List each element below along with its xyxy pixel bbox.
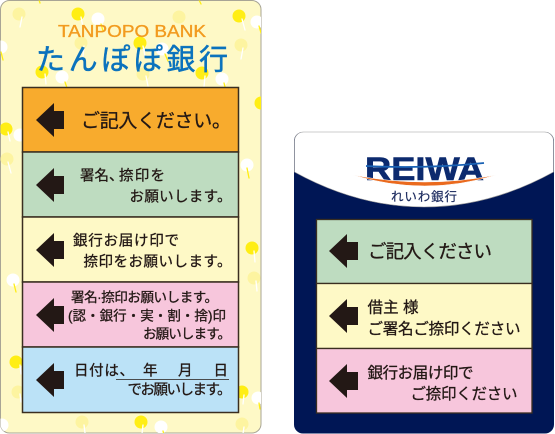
- panel: pink row: [22, 282, 238, 347]
- logo: TANPOPO BANK: TANPOPO BANK: [58, 21, 206, 41]
- logo blue stripe: [366, 163, 484, 167]
- dandelion dot pattern: [0, 0, 268, 434]
- panel: green row: 捺印を: [119, 168, 165, 184]
- logo: REIWA: REIWA: [365, 151, 484, 187]
- panel: pink row Reiwa: [316, 348, 532, 413]
- arrow: [36, 298, 64, 332]
- arrow: [329, 234, 358, 268]
- panel: green row: [22, 152, 238, 217]
- panel: yellow row: 捺印をお願いします。: [84, 254, 232, 270]
- panel: Reiwa Bank card: [294, 132, 554, 434]
- arrow: [329, 364, 358, 398]
- panel: blue row: 年: [143, 362, 158, 380]
- panel: pink row Reiwa: ご捺印ください: [410, 385, 518, 403]
- text: 署名·捺印お願いします。: [71, 290, 218, 305]
- panel: blue row: [22, 347, 238, 412]
- panel: yellow row Reiwa: ご署名ご捺印ください: [368, 320, 520, 338]
- panel: blue row: 日: [214, 364, 228, 380]
- arrow: [36, 233, 64, 267]
- logo orange swoosh: [353, 175, 496, 186]
- arrow: [36, 363, 64, 397]
- panel: Tanpopo Bank card: [0, 0, 268, 434]
- card background: [0, 0, 261, 433]
- panel: green row Reiwa: [316, 220, 532, 284]
- panel: orange row: [22, 88, 238, 152]
- logo: Tanpopo Bank Japanese name: たんぽぽ銀行: [36, 44, 228, 76]
- panel: yellow row Reiwa: [316, 284, 532, 348]
- text: 銀行お届け印で: [73, 232, 179, 250]
- text: ご記入ください: [368, 241, 492, 262]
- text: 銀行お届け印で: [368, 364, 474, 382]
- arrow: [36, 103, 64, 137]
- panel: yellow row: [22, 217, 238, 282]
- panel: blue row: 月: [178, 364, 192, 380]
- arrow: [36, 168, 64, 202]
- text: 借主 様: [368, 298, 419, 316]
- white curved header: [294, 132, 554, 207]
- date text: 日付は、: [74, 362, 134, 380]
- panel: pink row: (認・銀行・実・割・捨)印: [68, 308, 226, 324]
- text: ご記入ください。: [81, 110, 231, 132]
- panel: green row: お願いします。: [130, 188, 232, 206]
- text: 署名、: [80, 168, 124, 184]
- arrow: [329, 299, 358, 333]
- panel: pink row: お願いします。: [143, 326, 231, 342]
- card navy background: [294, 132, 554, 434]
- panel: blue row: でお願いします。: [128, 382, 232, 398]
- logo: Reiwa Bank Japanese name: れいわ銀行: [391, 190, 457, 204]
